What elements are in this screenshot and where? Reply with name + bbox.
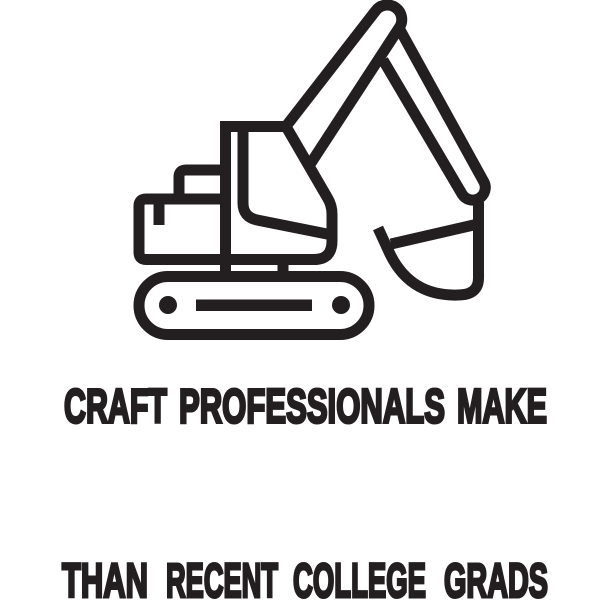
icon: excavator: [139, 5, 485, 335]
boom arm: [287, 5, 402, 166]
heading line one: PROFESSIONALS: [179, 380, 445, 434]
dipper arm: [383, 28, 485, 200]
heading line two: [62, 555, 548, 600]
machine body and cab: [139, 126, 332, 276]
heading line one: [64, 380, 547, 434]
heading line one: CRAFT: [64, 380, 167, 434]
bucket: [378, 202, 478, 295]
crawler track: [139, 276, 369, 334]
heading line one: MAKE: [457, 380, 547, 434]
